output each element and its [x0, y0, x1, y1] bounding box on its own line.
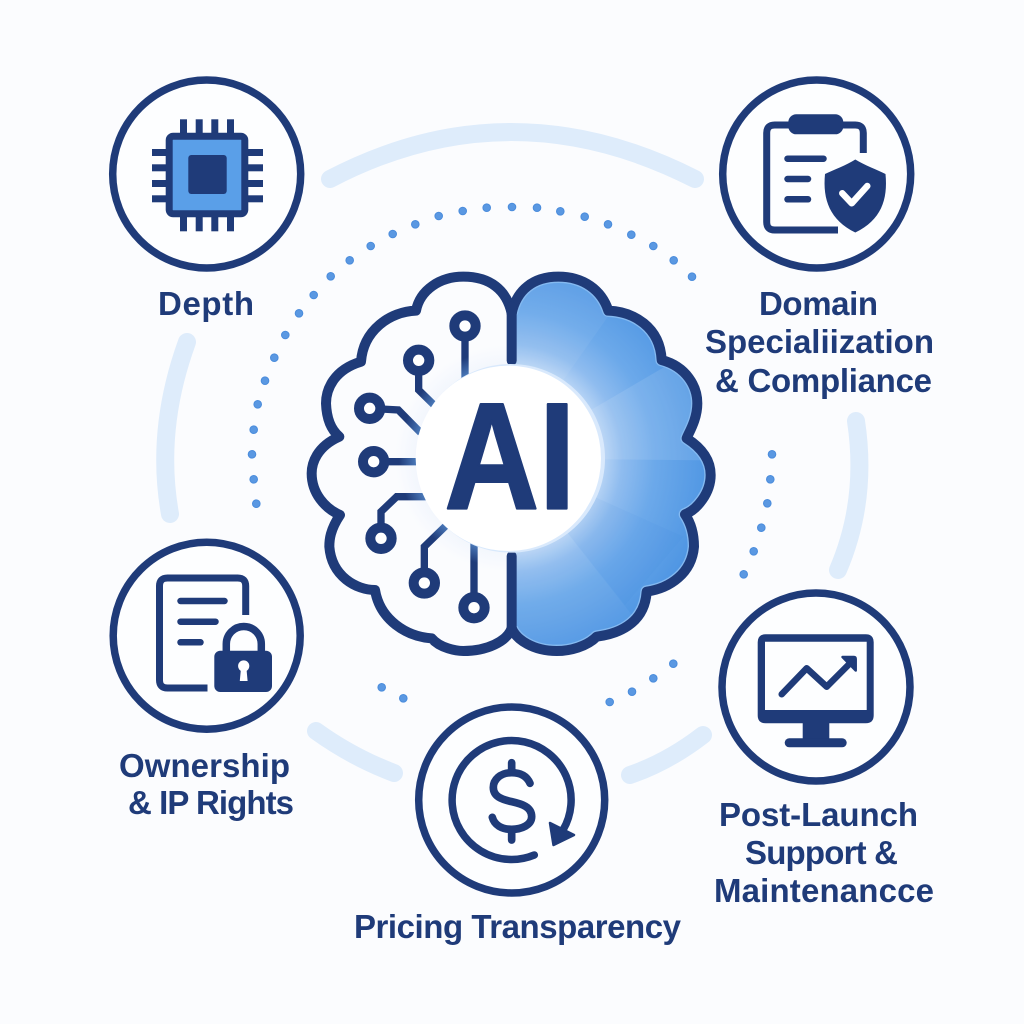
panel: ownership and IP rights: [113, 542, 300, 821]
label: domain specialization and compliance: & Compliance: [715, 362, 932, 399]
center disc: [416, 366, 601, 551]
circuit nodes: [359, 315, 485, 618]
circuit traces: [370, 326, 474, 608]
label: post-launch support and maintenance: Post-Launch: [719, 796, 918, 833]
label: pricing transparency: Pricing Transparency: [354, 908, 682, 945]
icon: chip: [152, 119, 263, 231]
label: post-launch support and maintenance: Support &: [745, 834, 898, 871]
icon: document with padlock: [160, 578, 272, 692]
label: domain specialization and compliance: [705, 285, 934, 399]
panel: domain specialization: [705, 80, 934, 399]
badge circle: [723, 80, 911, 268]
panel: pricing transparency: [354, 707, 682, 945]
label: post-launch support and maintenance: Maintenancce: [714, 872, 934, 909]
connecting arcs: [165, 132, 859, 775]
label: domain specialization and compliance: Specialiization: [705, 323, 934, 360]
central AI brain: [312, 253, 733, 670]
brain right lobe: [506, 272, 716, 656]
icon: clipboard with shield: [767, 114, 889, 235]
center disc rim: [416, 364, 605, 553]
infographic canvas: [108, 76, 933, 945]
panel: post-launch support: [714, 593, 934, 909]
panel: depth: [113, 80, 301, 322]
badge circle: [722, 593, 910, 781]
dotted orbit: [248, 203, 776, 706]
label: ownership and IP rights: & IP Rights: [128, 784, 294, 821]
center divider: [497, 307, 527, 628]
badge circle: [113, 542, 300, 729]
icon: monitor with trend line: [758, 634, 874, 747]
AI letters: AI: [444, 373, 575, 542]
brain left lobe: [306, 272, 517, 656]
label: ownership and IP rights: Ownership: [119, 747, 290, 784]
label: domain specialization and compliance: Domain: [759, 285, 878, 322]
label: post-launch support and maintenance: [714, 796, 934, 909]
label: depth: Depth: [158, 285, 254, 322]
badge circle: [419, 707, 605, 893]
badge circle: [113, 80, 301, 268]
icon: dollar with circular arrow: [452, 740, 574, 859]
label: ownership and IP rights: [119, 747, 294, 821]
